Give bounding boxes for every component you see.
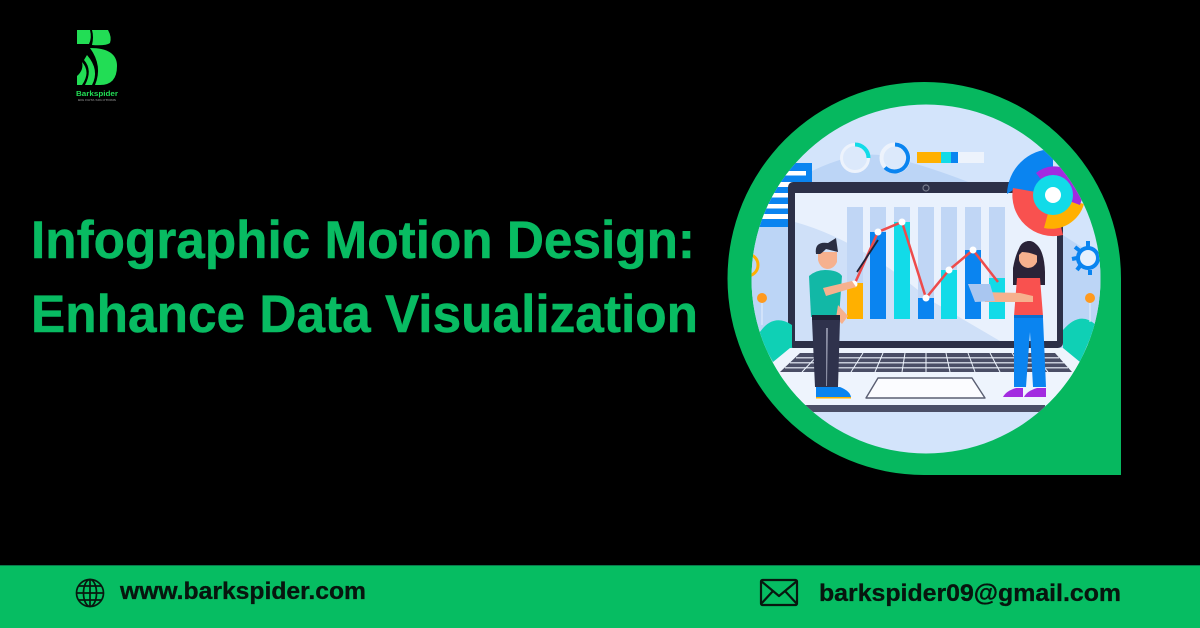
- laptop screen: [788, 182, 1063, 348]
- logo: Barkspider: [76, 30, 118, 102]
- person: man with pointer: [809, 238, 878, 398]
- title: Infographic Motion Design:: [31, 211, 695, 270]
- trackpad: [866, 378, 985, 398]
- gear icon: [1072, 241, 1098, 275]
- side decorations: plants and bulbs: [736, 254, 1096, 362]
- person: woman with tablet: [968, 241, 1046, 397]
- stacked list panel: [758, 163, 812, 227]
- website address: www.barkspider.com: [119, 578, 366, 605]
- footer bar: [0, 565, 1200, 628]
- title: [31, 211, 698, 344]
- icon: envelope: [761, 580, 797, 605]
- bar chart: [847, 207, 1005, 319]
- email address: barkspider09@gmail.com: [819, 580, 1121, 607]
- pie chart: [1007, 149, 1084, 236]
- title: Enhance Data Visualization: [31, 285, 698, 344]
- logo: Barkspider: Barkspider: [76, 91, 118, 98]
- teardrop badge: [728, 82, 1121, 475]
- logo: Barkspider: BIG DATA SOLUTIONS: [78, 98, 116, 102]
- laptop base and keyboard: [772, 348, 1080, 412]
- icon: globe: [76, 580, 104, 606]
- donut indicators and progress bar: [842, 144, 984, 172]
- illustration: data dashboard in circle: [736, 100, 1102, 456]
- line chart: [850, 218, 998, 302]
